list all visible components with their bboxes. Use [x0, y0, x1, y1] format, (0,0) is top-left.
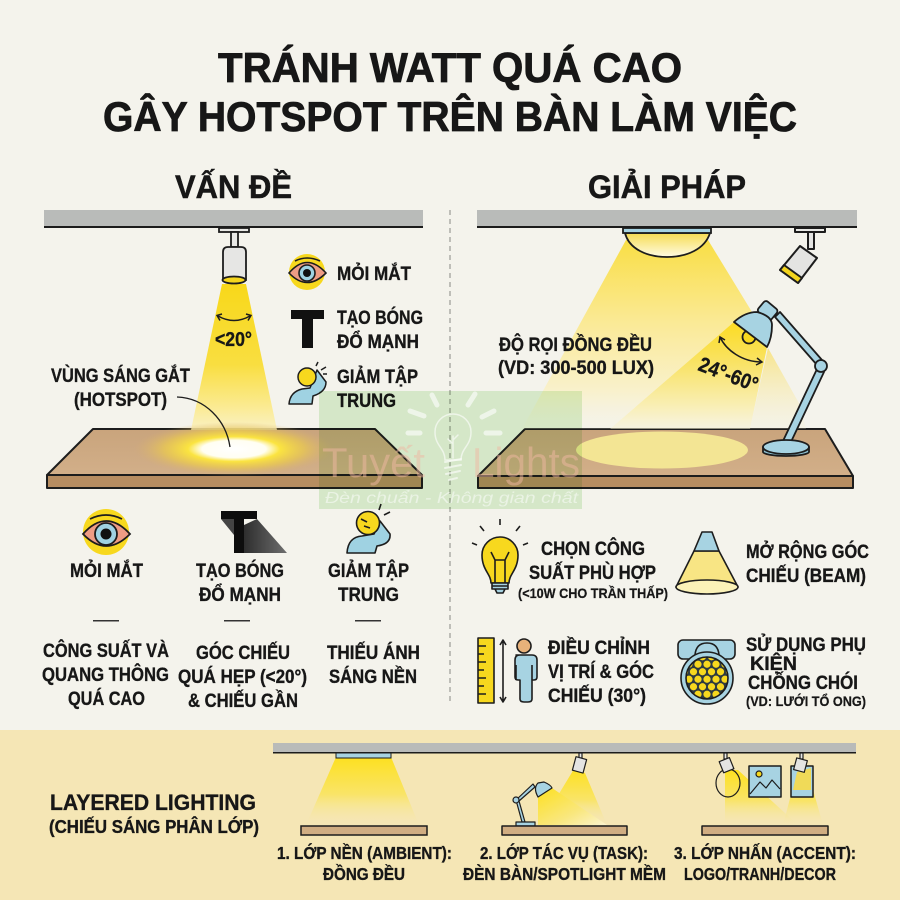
cause text: QUÁ HẸP (<20°) — [178, 665, 307, 688]
hotspot glow — [134, 422, 334, 476]
cause text: SÁNG NỀN — [329, 665, 417, 688]
text: phụ kiện chống chói: (VD: LƯỚI TỔ ONG) — [746, 692, 866, 709]
layer captions: 3. LỚP NHẤN (ACCENT): — [674, 842, 856, 863]
label: độ rọi đồng đều: (VD: 300-500 LUX) — [498, 357, 654, 379]
cause text — [327, 641, 420, 688]
text: chọn công suất: (<10W CHO TRẦN THẤP) — [518, 585, 668, 601]
text: điều chỉnh vị trí: VỊ TRÍ & GÓC — [548, 659, 654, 683]
cause text: QUÁ CAO — [68, 687, 145, 710]
layer captions: 2. LỚP TÁC VỤ (TASK): — [480, 842, 648, 863]
heading: layered lighting: (CHIẾU SÁNG PHÂN LỚP) — [49, 816, 259, 837]
panel: effects column 2 — [178, 511, 307, 712]
heading: giải pháp: GIẢI PHÁP — [588, 169, 746, 205]
label: tạo bóng đổ mạnh — [337, 305, 423, 353]
text: phụ kiện chống chói: CHỐNG CHÓI — [748, 670, 858, 694]
text: điều chỉnh vị trí — [548, 636, 654, 707]
text: phụ kiện chống chói: SỬ DỤNG PHỤ — [746, 632, 866, 656]
icon: ruler and person — [478, 638, 537, 703]
watermark name: Lights — [472, 439, 580, 486]
desk lamp beam — [610, 322, 767, 429]
panel: solution scene — [477, 210, 857, 488]
panel: effects column 3 — [327, 504, 420, 688]
icon: tired eye small — [289, 254, 326, 290]
track spotlight — [219, 228, 249, 284]
layer captions: LOGO/TRANH/DECOR — [684, 864, 836, 884]
layer captions — [277, 842, 856, 884]
watermark — [319, 391, 582, 509]
panel: effects column 1 — [42, 509, 169, 710]
ceiling rail left — [44, 210, 423, 228]
label: độ rọi đồng đều — [498, 332, 654, 379]
label: giảm tập trung: TRUNG — [337, 390, 396, 412]
text: phụ kiện chống chói — [746, 632, 866, 709]
text: điều chỉnh vị trí: ĐIỀU CHỈNH — [548, 636, 650, 659]
layer captions: 1. LỚP NỀN (AMBIENT): — [277, 842, 452, 863]
effect text — [196, 558, 284, 606]
cause text: THIẾU ÁNH — [327, 641, 420, 664]
cause text — [178, 640, 307, 712]
label: giảm tập trung — [337, 364, 418, 412]
layer 1: ambient — [301, 753, 427, 835]
hotspot callout — [51, 363, 230, 447]
heading: vấn đề: VẤN ĐỀ — [175, 169, 292, 205]
effect text: MỎI MẮT — [70, 558, 143, 582]
heading: layered lighting — [49, 790, 259, 837]
effect text — [328, 558, 409, 606]
angle marker — [215, 314, 252, 351]
cause text: GÓC CHIẾU — [196, 640, 290, 664]
cause text — [42, 638, 169, 710]
narrow light beam — [191, 284, 277, 430]
icon: light bulb — [472, 519, 528, 593]
icon: person small — [289, 362, 327, 404]
panel: layered lighting band — [0, 730, 900, 900]
panel: problem scene — [44, 210, 423, 488]
ambient wide beam — [522, 240, 767, 429]
cause text: QUANG THÔNG — [42, 662, 169, 686]
text: chọn công suất: SUẤT PHÙ HỢP — [529, 560, 656, 584]
layer 2: task — [502, 753, 627, 835]
label: tạo bóng đổ mạnh: TẠO BÓNG — [337, 305, 423, 329]
panel: solutions list — [472, 519, 869, 709]
icon: person with headache — [347, 504, 390, 553]
hotspot callout: VÙNG SÁNG GẮT — [51, 363, 190, 387]
label: mỏi mắt: MỎI MẮT — [337, 261, 411, 285]
icon: tired eye large — [83, 509, 130, 555]
watermark name — [322, 439, 580, 486]
title: GÂY HOTSPOT TRÊN BÀN LÀM VIỆC — [103, 92, 797, 140]
icon: honeycomb anti-glare accessory — [678, 640, 735, 704]
ceiling rail right — [477, 210, 857, 228]
lamp angle marker: 24°-60° — [695, 353, 761, 397]
label: tạo bóng đổ mạnh: ĐỔ MẠNH — [337, 329, 419, 353]
desk left — [47, 429, 422, 488]
icon: T with cast shadow — [221, 511, 287, 553]
text: chọn công suất — [518, 536, 668, 601]
effect text: TRUNG — [338, 584, 399, 606]
desk lamp — [734, 300, 827, 456]
effect text: ĐỔ MẠNH — [199, 582, 281, 606]
desk right — [478, 429, 853, 488]
text: mở rộng góc chiếu — [746, 539, 869, 587]
text: mở rộng góc chiếu: MỞ RỘNG GÓC — [746, 539, 869, 563]
ceiling dome light — [623, 228, 711, 257]
effect text: GIẢM TẬP — [328, 558, 409, 582]
label: độ rọi đồng đều: ĐỘ RỌI ĐỒNG ĐỀU — [499, 332, 652, 356]
label: giảm tập trung: GIẢM TẬP — [337, 364, 418, 388]
angled track spotlight — [780, 228, 825, 283]
layer 3: accent — [702, 753, 828, 835]
text: chọn công suất: CHỌN CÔNG — [541, 536, 645, 560]
lamp angle marker — [695, 337, 762, 397]
watermark name: Tuyết — [322, 439, 425, 486]
lamp side beam — [750, 348, 806, 429]
layer captions: ĐỒNG ĐỀU — [323, 863, 405, 884]
icon: T shadow small — [291, 310, 324, 348]
cause text: CÔNG SUẤT VÀ — [43, 638, 169, 662]
layer captions: ĐÈN BÀN/SPOTLIGHT MỀM — [463, 863, 666, 884]
text: phụ kiện chống chói: KIỆN — [750, 651, 797, 675]
icon: wide beam cone — [676, 532, 738, 594]
heading: layered lighting: LAYERED LIGHTING — [50, 790, 256, 815]
text: điều chỉnh vị trí: CHIẾU (30°) — [548, 684, 646, 707]
title: TRÁNH WATT QUÁ CAO — [218, 44, 682, 91]
effect text: TẠO BÓNG — [196, 558, 284, 582]
watermark slogan: Đèn chuẩn - Không gian chất — [325, 489, 579, 507]
angle marker: <20° — [215, 329, 252, 351]
watermark bulb — [408, 394, 500, 480]
text: mở rộng góc chiếu: CHIẾU (BEAM) — [746, 564, 866, 587]
rail — [273, 743, 856, 754]
light pool — [576, 432, 748, 468]
title — [103, 44, 797, 140]
cause text: & CHIẾU GẦN — [188, 689, 298, 712]
hotspot callout: (HOTSPOT) — [74, 389, 167, 411]
